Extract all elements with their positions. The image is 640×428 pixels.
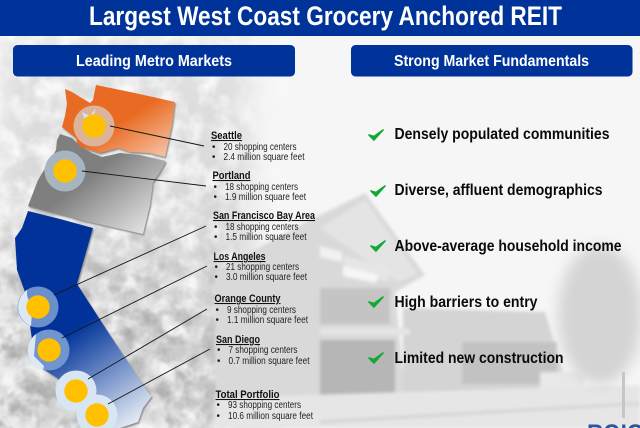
market marker: portland xyxy=(44,150,86,192)
title: Largest West Coast Grocery Anchored REIT xyxy=(89,1,562,31)
icon: green check xyxy=(369,297,383,307)
market label: total portfolio xyxy=(216,389,313,422)
leader lines from markers to labels xyxy=(54,126,210,404)
fundamental: densely populated communities: Densely populated communities xyxy=(394,126,610,143)
icon: green check xyxy=(369,353,383,363)
fundamental: limited new construction: Limited new construction xyxy=(394,350,564,367)
panel heading: strong market fundamentals: Strong Market Fundamentals xyxy=(394,53,589,70)
market label: san diego xyxy=(216,334,310,367)
market label: seattle: • xyxy=(212,152,216,163)
market label: seattle: 20 shopping centers xyxy=(224,142,297,153)
market label: san diego: 0.7 million square feet xyxy=(228,356,310,367)
market marker: san diego xyxy=(76,394,118,428)
map: california xyxy=(15,211,152,428)
market label: portland: • xyxy=(214,192,218,203)
market label: orange county xyxy=(214,293,308,326)
map: oregon xyxy=(28,134,166,234)
map of west coast states xyxy=(15,85,175,428)
fundamental: diverse, affluent demographics: Diverse, affluent demographics xyxy=(394,182,603,199)
market label: orange county: • xyxy=(216,305,220,316)
market label: portland: 18 shopping centers xyxy=(225,182,298,193)
market label: total portfolio: • xyxy=(216,400,220,411)
fundamental: high barriers to entry: High barriers to entry xyxy=(394,294,538,311)
market label: seattle: • xyxy=(212,142,216,153)
icon: green check xyxy=(371,186,385,196)
market label: portland: Portland xyxy=(212,170,250,182)
market label: orange county: • xyxy=(216,315,220,326)
map: washington xyxy=(62,85,175,157)
market label: san francisco bay area: San Francisco Bay Area xyxy=(213,210,315,222)
market label: san francisco bay area: • xyxy=(214,232,218,243)
market marker: los angeles xyxy=(28,330,70,370)
market label: total portfolio: Total Portfolio xyxy=(216,389,280,401)
market label: los angeles xyxy=(214,251,307,283)
market label: los angeles: Los Angeles xyxy=(214,251,266,263)
market label: orange county: 9 shopping centers xyxy=(227,305,296,316)
market label: orange county: 1.1 million square feet xyxy=(227,315,308,326)
market label: los angeles: 3.0 million square feet xyxy=(226,272,307,283)
market label: los angeles: • xyxy=(214,262,218,273)
header bar xyxy=(0,0,640,36)
market label: san diego: San Diego xyxy=(216,334,260,346)
market label: san diego: • xyxy=(217,345,221,356)
panel heading: strong market fundamentals xyxy=(351,45,632,76)
icon: green check xyxy=(371,241,385,251)
market label: san diego: 7 shopping centers xyxy=(228,345,298,356)
panel heading: leading metro markets xyxy=(13,45,295,76)
panel heading: leading metro markets: Leading Metro Markets xyxy=(76,53,232,70)
market label: san francisco bay area: 1.5 million square feet xyxy=(226,232,307,243)
market marker: orange county xyxy=(56,370,96,412)
market label: total portfolio: 93 shopping centers xyxy=(228,400,301,411)
market marker: seattle xyxy=(74,106,114,146)
market label: total portfolio: • xyxy=(216,411,220,422)
market label: san francisco bay area xyxy=(213,210,315,243)
market label: total portfolio: 10.6 million square feet xyxy=(228,411,313,422)
market marker: san francisco bay area xyxy=(18,286,58,328)
market label: seattle: 2.4 million square feet xyxy=(224,152,305,163)
market label: portland: 1.9 million square feet xyxy=(225,192,306,203)
icon: green check xyxy=(369,130,383,140)
market label: san francisco bay area: 18 shopping centers xyxy=(226,222,299,233)
market label: san francisco bay area: • xyxy=(214,222,218,233)
market label: seattle: Seattle xyxy=(211,130,242,142)
market label: portland: • xyxy=(214,182,218,193)
market label: orange county: Orange County xyxy=(214,293,281,305)
market label: san diego: • xyxy=(217,356,221,367)
market label: seattle xyxy=(211,130,305,163)
market label: los angeles: 21 shopping centers xyxy=(226,262,299,273)
market label: los angeles: • xyxy=(214,272,218,283)
market label: portland xyxy=(212,170,306,203)
